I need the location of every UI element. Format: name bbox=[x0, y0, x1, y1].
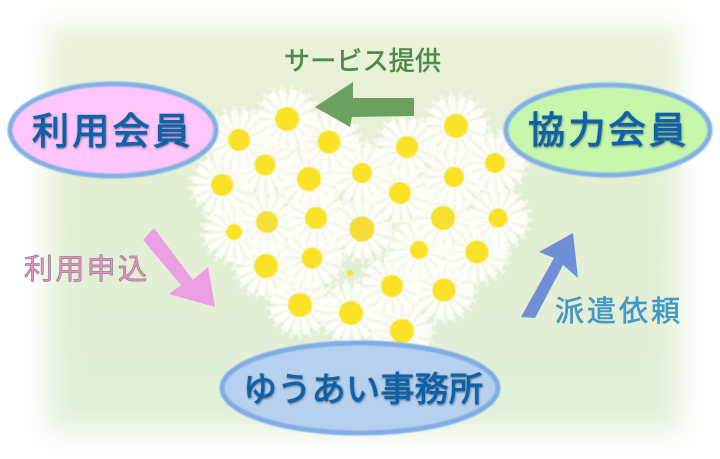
arrow: service provision bbox=[315, 82, 414, 127]
node: cooperating members bbox=[506, 85, 710, 175]
label: dispatch request: 派遣依頼 bbox=[555, 295, 680, 328]
node: user members bbox=[10, 84, 216, 176]
background panel bbox=[48, 24, 680, 432]
label: service provision: サービス提供 bbox=[284, 46, 441, 76]
heading: user members: 利用会員 bbox=[32, 111, 190, 152]
heading: cooperating members: 協力会員 bbox=[528, 110, 686, 151]
node: yuuai office bbox=[222, 343, 498, 433]
label: usage application: 利用申込 bbox=[24, 253, 147, 286]
arrow: usage application bbox=[143, 228, 215, 307]
daisy bouquet bbox=[192, 89, 528, 361]
heading: yuuai office: ゆうあい事務所 bbox=[243, 371, 483, 409]
arrow: dispatch request bbox=[521, 233, 578, 318]
